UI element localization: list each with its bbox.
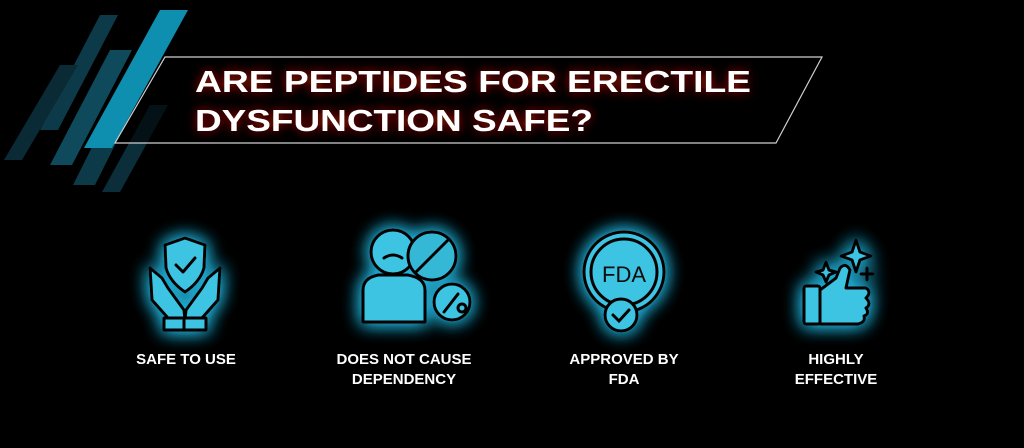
- label: does not cause dependency: DEPENDENCY: [352, 371, 456, 388]
- label: does not cause dependency: DOES NOT CAUSE: [336, 351, 472, 368]
- icon: hands with shield: [150, 238, 220, 330]
- labels: [136, 351, 877, 388]
- icon: FDA approved: [584, 232, 664, 331]
- label: approved by fda: APPROVED BY: [569, 351, 679, 368]
- decorative stripes: [4, 10, 188, 192]
- title banner: [115, 57, 822, 143]
- title text: [195, 64, 751, 138]
- icon: FDA approved: FDA: [602, 262, 646, 287]
- label: highly effective: EFFECTIVE: [795, 371, 877, 388]
- icon: no dependency: [363, 230, 470, 322]
- icon: thumbs up: [804, 240, 873, 324]
- title text: DYSFUNCTION SAFE?: [195, 103, 593, 138]
- label: highly effective: HIGHLY: [808, 351, 864, 368]
- title text: ARE PEPTIDES FOR ERECTILE: [195, 64, 751, 99]
- label: approved by fda: FDA: [609, 371, 640, 388]
- label: safe to use: SAFE TO USE: [136, 351, 236, 368]
